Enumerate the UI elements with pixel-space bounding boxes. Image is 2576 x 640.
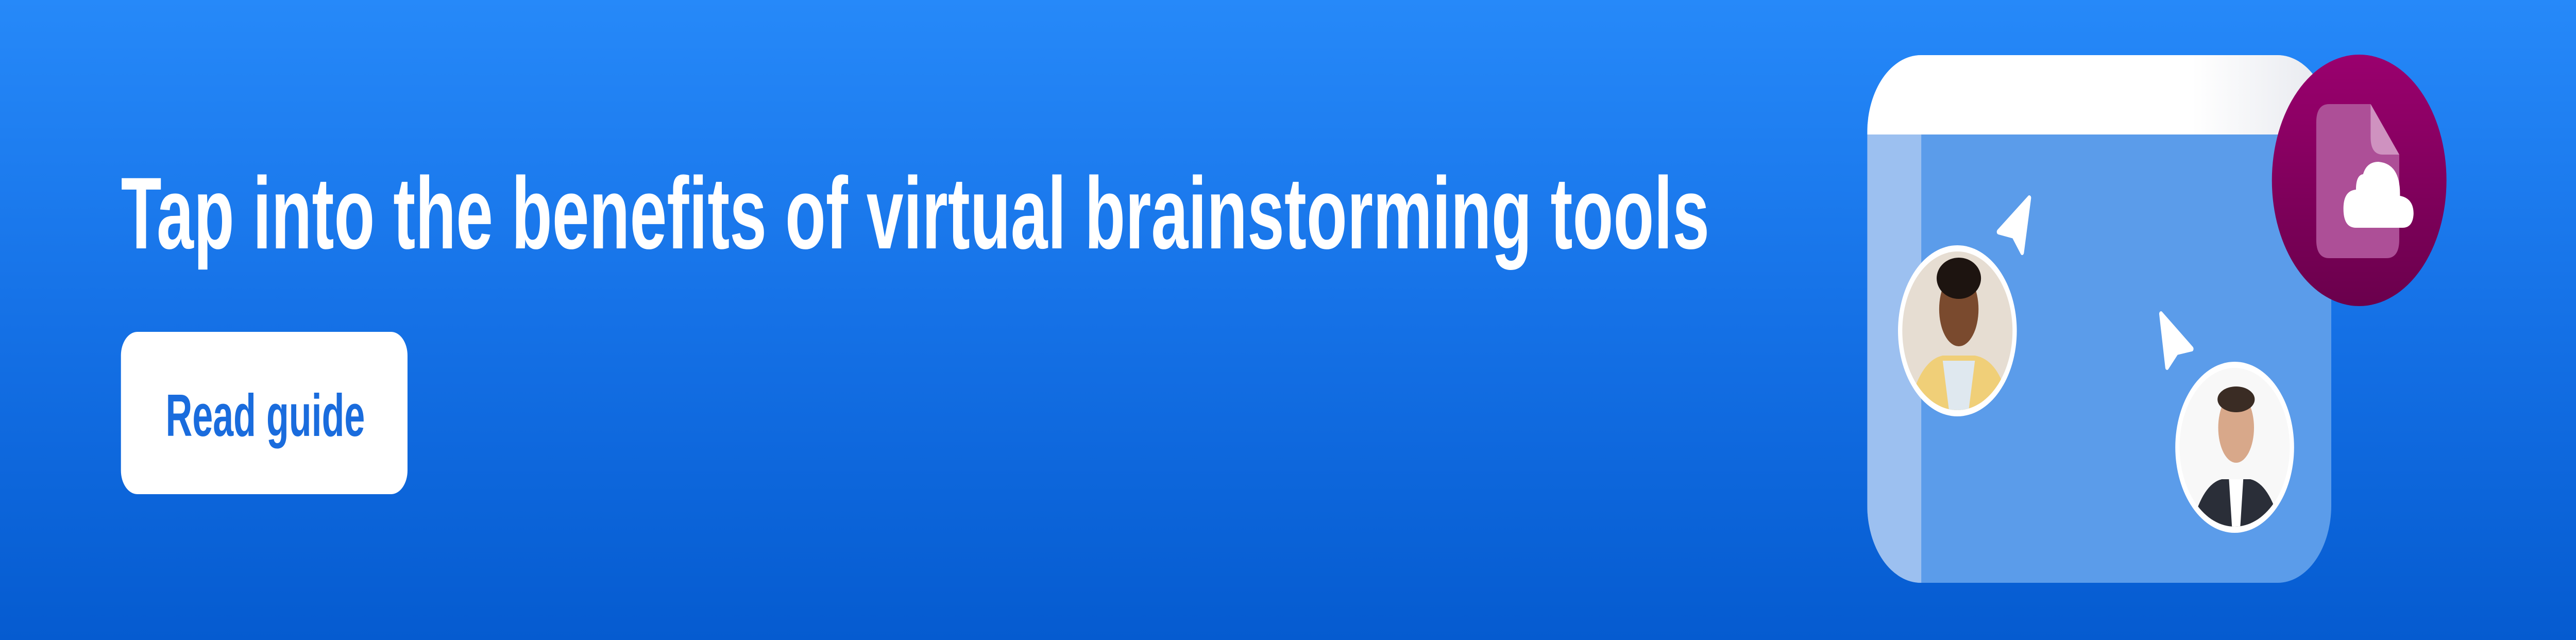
title: Tap into the benefits of virtual brainstorming tools [121, 157, 1709, 271]
button: read guide: Read guide [166, 383, 365, 449]
avatar 2 [2175, 361, 2297, 536]
avatar 1 [1896, 245, 2018, 417]
cursor 2 [2161, 314, 2192, 367]
button: read guide [121, 332, 408, 494]
window [1867, 55, 2331, 583]
cursor 1 [1998, 198, 2029, 252]
icon: cloud document badge [2272, 55, 2447, 306]
